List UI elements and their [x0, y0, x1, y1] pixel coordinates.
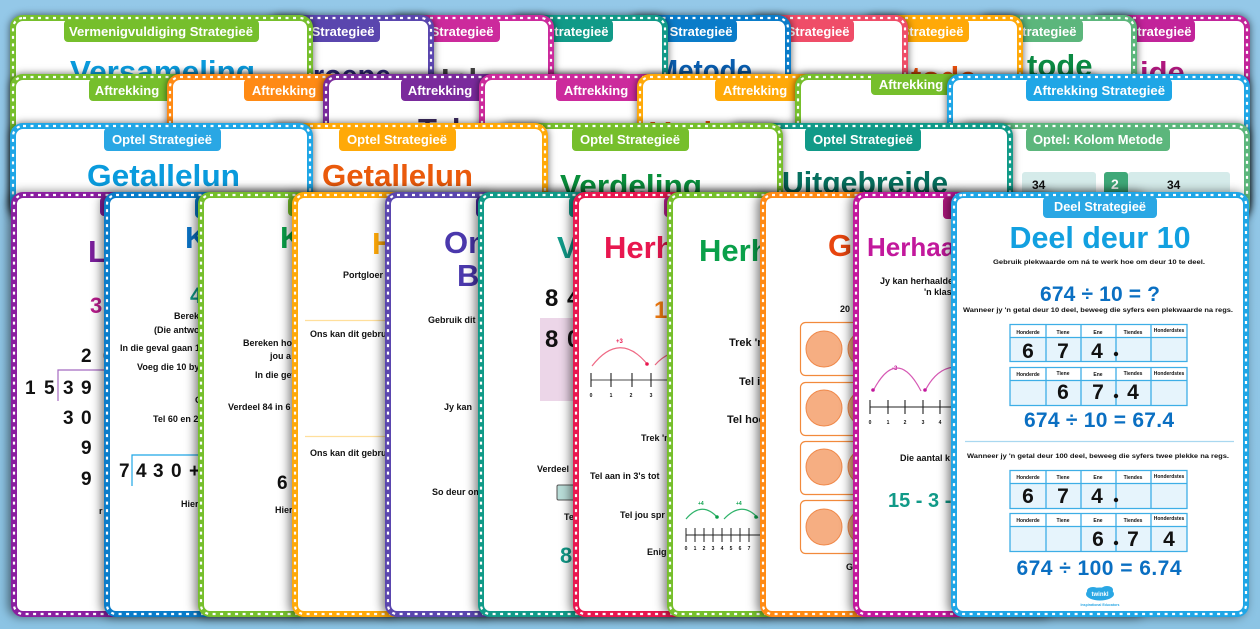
row 2 poster: subtraction yellow: Vashou [650, 115, 760, 150]
poster: teal: 0 [567, 326, 580, 353]
row 2 poster: subtraction blue: Aftrekking Strategieë [1033, 83, 1165, 98]
place value table 2: 4 [1127, 381, 1139, 404]
poster: repeated addition green: Trek 'n [729, 337, 764, 349]
logo: twinkl: twinkl [1091, 592, 1109, 598]
row 3 poster: expanded teal: Uitgebreide [782, 165, 948, 200]
poster: long division purple: Lang [88, 234, 162, 269]
row 1 poster: orange: tode [911, 60, 976, 95]
row 2 poster: subtraction yellow: Aftrekking [723, 83, 787, 98]
poster: long division purple: 9 [81, 378, 92, 399]
place value table 2: Honderdstes [1154, 371, 1184, 377]
instruction: divide by 100: Wanneer jy 'n getal deur 100 deel, beweeg die syfers twee plekke na regs. [967, 454, 1229, 460]
row 1 poster: red: Strategieë [787, 24, 849, 39]
row 2 poster: subtraction purple [326, 77, 626, 217]
poster: teal: 8 [560, 543, 572, 568]
poster: short division blue: 4 [136, 461, 147, 482]
poster: repeated subtraction magenta: Herhaalde [867, 232, 993, 262]
poster: repeated subtraction magenta: 1 [887, 420, 890, 426]
poster: short division green: 6 [277, 473, 288, 494]
place value table 1: 4 [1091, 340, 1103, 363]
place value table 1: Tiene [1057, 330, 1070, 336]
row 1 poster: blue: Strategieë [670, 24, 732, 39]
poster: repeated addition green: +4 [736, 501, 742, 507]
poster: divide by 10 [954, 195, 1246, 614]
poster: long division purple: 3 [63, 408, 74, 429]
row 3 poster: number line blue: Optel Strategieë [112, 132, 212, 147]
poster: repeated addition red: Enig [647, 547, 666, 557]
poster: long division purple: 2 [81, 346, 92, 367]
row 3 poster: partition green [500, 126, 780, 216]
tab: Deel Strategieë [1043, 197, 1157, 218]
poster: repeated addition green: 0 [685, 546, 688, 552]
poster: short division green: Verdeel 84 in 6 [228, 402, 291, 412]
row 1 poster: magenta [1093, 18, 1247, 208]
poster: short division green: In die geval [255, 370, 304, 380]
row 2 poster: subtraction magenta [482, 77, 782, 217]
row 1 poster: magenta: Strategieë [1129, 24, 1191, 39]
poster: repeated addition green: 3 [712, 546, 715, 552]
row 1 poster: multiplication green [13, 18, 310, 208]
row 3 poster: partition green: Optel Strategieë [580, 132, 680, 147]
poster: repeated subtraction magenta: 0 [869, 420, 872, 426]
row 1 poster: indigo [270, 18, 431, 208]
row 1 poster: blue: Metode [655, 53, 752, 88]
poster: repeated addition red: Tel jou spr [620, 510, 665, 520]
row 1 poster: indigo: roepe [313, 58, 391, 93]
row 2 poster: subtraction blue [950, 77, 1247, 217]
row 1 poster: red [750, 18, 905, 208]
poster: short division blue: Bereken [174, 311, 210, 321]
place value table 4 [1010, 513, 1187, 552]
poster: repeated subtraction magenta: -3 [892, 366, 898, 372]
row 1 poster: orange [865, 18, 1020, 208]
poster: repeated addition green: +4 [698, 501, 704, 507]
poster: long division purple: 9 [81, 469, 92, 490]
poster: repeated addition green: Tel hoe [727, 414, 765, 426]
place value table 2: 7 [1092, 381, 1104, 404]
place value table 1 [1010, 324, 1187, 363]
place value table 4: Tiendes [1124, 518, 1143, 524]
poster: repeated addition red: Trek 'n [641, 433, 670, 443]
poster: repeated addition green: 2 [703, 546, 706, 552]
poster: indigo: Jy kan [444, 402, 472, 412]
poster: short division blue: Kort [185, 220, 249, 255]
poster: repeated subtraction magenta: 15 - 3 - [888, 490, 951, 512]
row 1 poster: magenta: ide [1140, 55, 1185, 90]
place value table 4: Tiene [1057, 518, 1070, 524]
row 3 poster: column method: 34 [1032, 178, 1046, 192]
poster: repeated subtraction magenta: 3 [922, 420, 925, 426]
poster: groups orange: 20 [840, 304, 850, 314]
poster: long division purple: 3 [63, 378, 74, 399]
poster: long division purple: 5 [44, 378, 55, 399]
row 1 poster: teal [510, 18, 665, 208]
result: 674 ÷ 100 = 6.74: 674 ÷ 100 = 6.74 [1016, 557, 1182, 580]
poster: repeated subtraction magenta: Die aantal k [900, 453, 951, 463]
poster: repeated addition green: Tel i [739, 376, 760, 388]
place value table 3: Tiene [1057, 475, 1070, 481]
poster: teal [481, 195, 771, 614]
logo: twinkl: Inspirational Educators [1081, 603, 1119, 607]
row 2 poster: subtraction green [13, 77, 313, 217]
poster: long division purple: 6 [103, 346, 114, 367]
poster: long division purple: r [99, 506, 103, 516]
row 3 poster: column method: 34 [1167, 178, 1181, 192]
poster: repeated addition red: +3 [616, 339, 624, 345]
place value table 2 [1010, 367, 1187, 406]
instruction: divide by 10: Wanneer jy 'n getal deur 10 deel, beweeg die syfers een plekwaarde na regs. [963, 308, 1233, 314]
poster: short division blue: (Die antwoord [154, 325, 214, 335]
row 2 poster: subtraction green 2: Aftrekking [879, 77, 943, 92]
heading: Deel deur 10: Deel deur 10 [1010, 220, 1190, 255]
result: 674 ÷ 10 = 67.4: 674 ÷ 10 = 67.4 [1024, 409, 1174, 432]
poster: indigo [388, 195, 678, 614]
poster: repeated addition green: Herhaal [699, 233, 813, 268]
equation: 674 ÷ 10 = ?: 674 ÷ 10 = ? [1040, 283, 1160, 306]
poster: halving orange: Ons kan dit gebruik [310, 329, 395, 339]
place value table 4: Honderdstes [1154, 516, 1184, 522]
place value table 4: 7 [1127, 528, 1139, 551]
row 1 poster: green: tode [1027, 48, 1092, 83]
place value table 2: Tiendes [1124, 371, 1143, 377]
divider [965, 440, 1234, 442]
row 3 poster: partition green: Verdeling [560, 168, 702, 203]
poster: teal: 8 [545, 285, 558, 312]
poster: repeated addition green: 1 [694, 546, 697, 552]
intro text: Gebruik plekwaarde om ná te werk hoe om deur 10 te deel. [993, 260, 1205, 266]
poster: groups orange [763, 195, 1053, 614]
row 2 poster: subtraction purple: Tel [418, 112, 460, 147]
place value table 1: Tiendes [1124, 330, 1143, 336]
poster: repeated addition red: 0 [590, 393, 593, 399]
poster: repeated subtraction magenta: 2 [904, 420, 907, 426]
poster: short division green [201, 195, 491, 614]
row 3 poster: number line orange: Optel Strategieë [347, 132, 447, 147]
poster: repeated subtraction magenta: 4 [939, 420, 942, 426]
poster: halving orange [295, 195, 585, 614]
place value table 1: 6 [1022, 340, 1034, 363]
place value table 2: Tiene [1057, 371, 1070, 377]
place value table 2: Ene [1093, 372, 1103, 378]
poster: short division blue: 4 [190, 283, 203, 308]
place value table 1: Ene [1093, 330, 1103, 336]
poster: short division green: Kort [280, 220, 344, 255]
poster: teal: 8 [545, 326, 558, 353]
poster: short division green: Bereken hoe [243, 338, 297, 348]
poster: repeated addition red: 1 [610, 393, 613, 399]
row 3 poster: number line blue: Getallelun [87, 158, 240, 193]
logo: twinkl [1081, 586, 1119, 607]
place value table 4: Ene [1093, 518, 1103, 524]
poster: repeated addition red: Herhaal [604, 230, 718, 265]
place value table 3: Tiendes [1124, 475, 1143, 481]
poster: repeated addition red: 12 [654, 297, 681, 324]
place value table 4: 6 [1092, 528, 1104, 551]
poster: indigo: B [457, 258, 479, 293]
poster: repeated addition green [670, 195, 960, 614]
poster: repeated subtraction magenta: Jy kan herhaalde [880, 276, 953, 286]
row 3 poster: expanded teal: Optel Strategieë [813, 132, 913, 147]
row 2 poster: subtraction magenta: Aftrekking [564, 83, 628, 98]
poster: short division green: Hier [275, 505, 293, 515]
poster: short division blue: 0 [171, 461, 182, 482]
poster: groups orange: G [846, 562, 853, 572]
row 2 poster: subtraction orange [170, 77, 470, 217]
row 3 poster: column method: 2 [1111, 176, 1119, 192]
poster: halving orange: Portgloer [343, 270, 384, 280]
place value table 3: 7 [1057, 485, 1069, 508]
row 2 poster: subtraction green: Aftrekking [95, 83, 159, 98]
poster: teal: V [557, 230, 578, 265]
poster: short division blue: 3 [153, 461, 164, 482]
row 1 poster: green [980, 18, 1134, 208]
row 3 poster: expanded teal [730, 126, 1010, 216]
poster: indigo: Gebruik dit [428, 315, 476, 325]
row 1 poster: multiplication green: Versameling [70, 54, 255, 89]
row 2 poster: subtraction orange: Aftrekking [252, 83, 316, 98]
place value table 3: 4 [1091, 485, 1103, 508]
row 1 poster: pink [390, 18, 551, 208]
poster: teal: 4 [567, 285, 581, 312]
place value table 1: 7 [1057, 340, 1069, 363]
place value table 3: Honderdstes [1154, 474, 1184, 480]
poster: teal: Te [564, 512, 574, 522]
row 1 poster: orange: Strategieë [901, 24, 963, 39]
row 1 poster: teal: Strategieë [546, 24, 608, 39]
poster: short division blue: G [195, 395, 202, 405]
poster: short division blue: Hier [181, 499, 199, 509]
poster: short division blue: 7 [119, 461, 130, 482]
poster: short division blue: In die geval gaan 1 [120, 343, 200, 353]
poster: repeated addition red: Tel aan in 3's tot [590, 471, 660, 481]
row 3 poster: number line orange: Getallelun [322, 158, 473, 193]
poster: repeated addition green: 6 [739, 546, 742, 552]
row 1 poster: indigo: Strategieë [312, 24, 374, 39]
place value table 2: 6 [1057, 381, 1069, 404]
place value table 1: Honderde [1016, 330, 1040, 336]
poster: teal: Verdeel [537, 464, 569, 474]
poster: long division purple: 0 [81, 408, 92, 429]
row 3 poster: column method: Optel: Kolom Metode [1033, 132, 1163, 147]
row 2 poster: subtraction yellow [640, 77, 940, 217]
poster: halving orange: Halveer [372, 226, 484, 261]
poster: repeated addition red: 2 [630, 393, 633, 399]
poster: short division blue: Voeg die 10 by [137, 362, 199, 372]
poster: short division blue: + [189, 461, 200, 482]
row 1 poster: multiplication green: Vermenigvuldiging Strategieë [69, 24, 253, 39]
poster: repeated subtraction magenta: 'n klas [924, 287, 952, 297]
place value table 3: 6 [1022, 485, 1034, 508]
poster: halving orange: Ons kan dit gebruik [310, 448, 395, 458]
poster: repeated addition green: 7 [748, 546, 751, 552]
row 2 poster: subtraction green 2 [798, 74, 1098, 217]
poster: repeated addition green: 5 [730, 546, 733, 552]
poster: short division green: jou a [269, 351, 292, 361]
row 1 poster: blue [630, 18, 788, 208]
row 1 poster: green: Strategieë [1014, 24, 1076, 39]
place value table 3 [1010, 470, 1187, 508]
row 1 poster: pink: Strategieë [431, 24, 493, 39]
poster: repeated subtraction magenta [856, 195, 1146, 614]
tab: Deel Strategieë: Deel Strategieë [1054, 199, 1146, 214]
row 2 poster: subtraction purple: Aftrekking [408, 83, 472, 98]
row 3 poster: number line orange [270, 126, 545, 216]
poster: long division purple: 1 [25, 378, 36, 399]
poster: short division blue [107, 195, 397, 614]
poster: indigo: Om [444, 225, 496, 260]
row 1 poster: pink: Ink [441, 62, 487, 97]
poster: long division purple: 3 [90, 293, 102, 318]
poster: long division purple: 9 [81, 438, 92, 459]
poster: indigo: So deur om [432, 487, 482, 497]
place value table 4: 4 [1163, 528, 1175, 551]
poster: repeated addition green: 4 [721, 546, 724, 552]
poster: groups orange: Groepe [828, 228, 937, 263]
row 3 poster: column method [960, 126, 1247, 216]
place value table 3: Honderde [1016, 475, 1040, 481]
poster: repeated addition red [576, 195, 866, 614]
place value table 3: Ene [1093, 475, 1103, 481]
poster: long division purple [14, 195, 304, 614]
place value table 2: Honderde [1016, 372, 1040, 378]
poster: short division blue: Tel 60 en 2 [153, 414, 198, 424]
poster: repeated addition red: 3 [650, 393, 653, 399]
row 3 poster: number line blue [13, 126, 310, 216]
place value table 4: Honderde [1016, 518, 1040, 524]
place value table 1: Honderdstes [1154, 328, 1184, 334]
